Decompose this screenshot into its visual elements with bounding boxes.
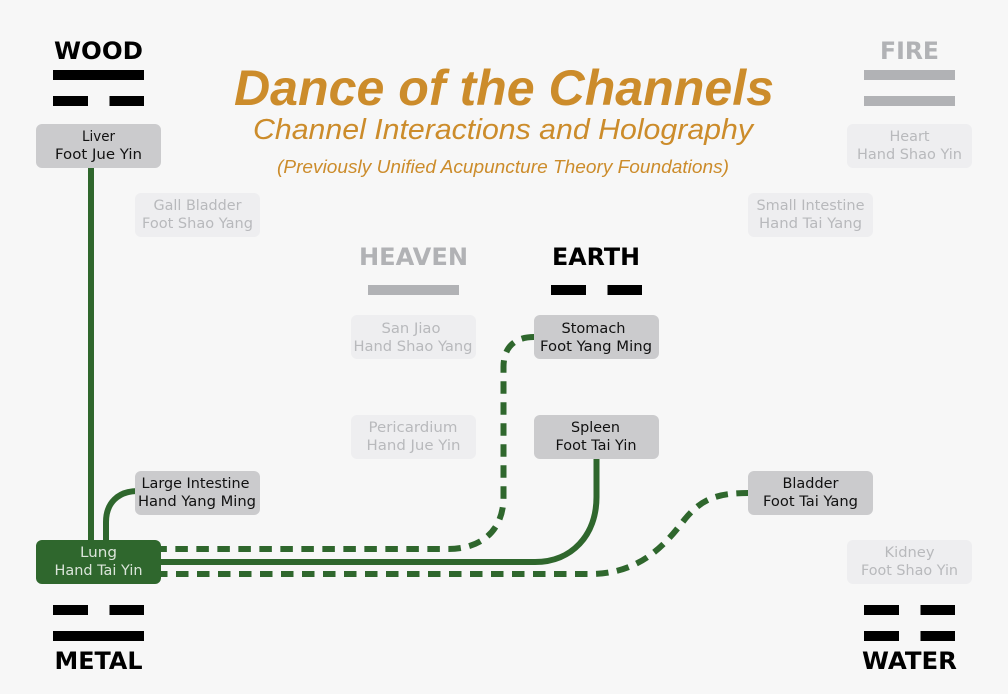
node: large intestine: Large Intestine bbox=[142, 476, 250, 492]
node: bladder: Foot Tai Yang bbox=[763, 494, 858, 510]
node: stomach: Foot Yang Ming bbox=[540, 339, 652, 355]
node: pericardium: Pericardium bbox=[368, 420, 458, 436]
channel connection lines bbox=[91, 165, 750, 574]
node: small intestine bbox=[748, 193, 873, 237]
node: pericardium: Hand Jue Yin bbox=[366, 438, 460, 454]
node: heart bbox=[847, 124, 972, 168]
node: liver: Liver bbox=[82, 129, 115, 145]
subtitle: Channel Interactions and Holography bbox=[253, 114, 755, 146]
node: lung bbox=[36, 540, 161, 584]
element: earth bbox=[551, 243, 642, 295]
node: kidney: Kidney bbox=[884, 545, 934, 561]
node: small intestine: Small Intestine bbox=[756, 198, 864, 214]
element: fire: FIRE bbox=[880, 37, 939, 65]
node: lung: Lung bbox=[80, 545, 117, 561]
node: lung: Hand Tai Yin bbox=[54, 563, 142, 579]
element: water: WATER bbox=[862, 647, 957, 675]
node: gall bladder bbox=[135, 193, 260, 237]
node: pericardium bbox=[351, 415, 476, 459]
node: liver: Foot Jue Yin bbox=[55, 147, 142, 163]
previous title note: (Previously Unified Acupuncture Theory Foundations) bbox=[277, 157, 729, 177]
node: san jiao: San Jiao bbox=[382, 321, 440, 337]
title block bbox=[234, 60, 774, 177]
node: spleen: Foot Tai Yin bbox=[556, 438, 636, 454]
element: earth: EARTH bbox=[552, 243, 640, 271]
solid line: spleen to lung bbox=[155, 455, 596, 562]
element: wood: WOOD bbox=[54, 37, 143, 65]
node: san jiao: Hand Shao Yang bbox=[354, 339, 472, 355]
element: heaven: HEAVEN bbox=[359, 243, 468, 271]
node: kidney bbox=[847, 540, 972, 584]
node: heart: Hand Shao Yin bbox=[857, 147, 962, 163]
dashed line: stomach to lung bbox=[155, 337, 534, 549]
node: stomach: Stomach bbox=[562, 321, 626, 337]
node: spleen: Spleen bbox=[571, 420, 620, 436]
solid line: large intestine to lung bbox=[106, 491, 138, 545]
node: small intestine: Hand Tai Yang bbox=[759, 216, 862, 232]
element: heaven bbox=[359, 243, 468, 295]
node: kidney: Foot Shao Yin bbox=[861, 563, 958, 579]
element: fire bbox=[864, 37, 955, 106]
node: stomach bbox=[534, 315, 659, 359]
node: san jiao bbox=[351, 315, 476, 359]
main title: Dance of the Channels bbox=[234, 60, 774, 116]
node: liver bbox=[36, 124, 161, 168]
node: large intestine: Hand Yang Ming bbox=[138, 494, 256, 510]
element: metal bbox=[53, 605, 144, 675]
node: bladder: Bladder bbox=[782, 476, 839, 492]
node: large intestine bbox=[135, 471, 260, 515]
element: water bbox=[862, 605, 957, 675]
element: metal: METAL bbox=[54, 647, 142, 675]
element: wood bbox=[53, 37, 144, 106]
node: gall bladder: Foot Shao Yang bbox=[142, 216, 253, 232]
node: gall bladder: Gall Bladder bbox=[154, 198, 242, 214]
node: heart: Heart bbox=[890, 129, 930, 145]
node: spleen bbox=[534, 415, 659, 459]
solid line: liver to lung bbox=[88, 165, 94, 545]
node: bladder bbox=[748, 471, 873, 515]
dashed line: bladder to lung bbox=[155, 493, 750, 574]
